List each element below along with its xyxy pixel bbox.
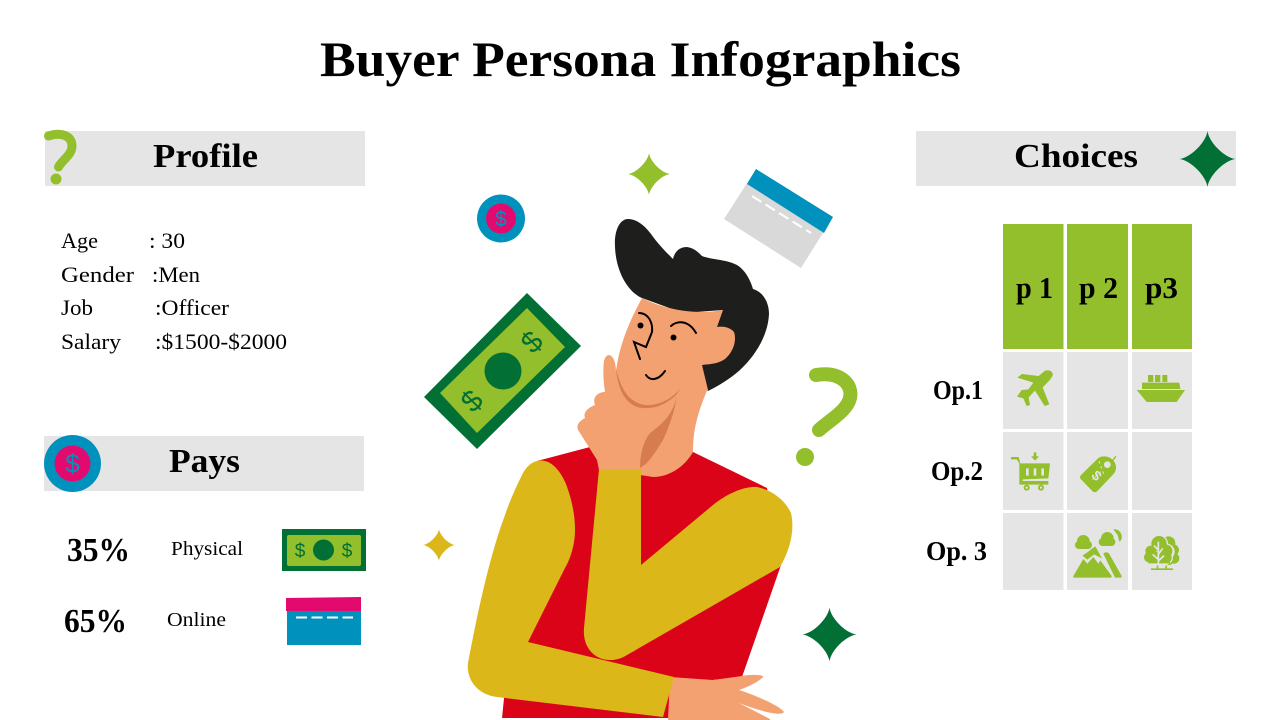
icon: dark green star [1180, 131, 1236, 187]
panel: pays [44, 435, 366, 645]
profile details: :Men [152, 262, 200, 287]
icon: lime star [628, 153, 670, 195]
column headers: p 1 [1016, 270, 1053, 305]
table cells [1003, 352, 1192, 590]
physical row: Physical [171, 538, 243, 560]
row labels: Op.1 [933, 375, 983, 405]
online row: Online [167, 609, 226, 631]
pays heading: Pays [169, 443, 240, 480]
title: Buyer Persona Infographics [320, 31, 961, 87]
row labels: Op. 3 [926, 536, 987, 566]
profile details: Age [61, 228, 98, 253]
physical row [67, 529, 366, 571]
neck and collar [625, 388, 708, 477]
face [616, 298, 735, 407]
jaw line [616, 368, 680, 408]
profile header bar [45, 131, 365, 186]
column headers [1003, 224, 1192, 349]
icon: large question mark [796, 374, 850, 466]
left sleeve [468, 461, 674, 717]
profile heading: Profile [153, 138, 258, 175]
column headers: p3 [1145, 270, 1178, 305]
icon: coin [44, 435, 101, 492]
icon: banknote: $ [342, 541, 353, 562]
row labels [926, 375, 987, 566]
profile details: :$1500-$2000 [155, 329, 287, 354]
icon: price tag: $ [1088, 467, 1105, 484]
profile details: Job [61, 295, 93, 320]
online row [64, 597, 361, 645]
hand on chin [577, 355, 678, 470]
profile details [61, 228, 287, 354]
icon: floating coin: $ [495, 208, 507, 231]
panel: profile [45, 131, 365, 354]
icon: question mark [48, 134, 72, 184]
icon: large banknote: $ [515, 325, 550, 360]
right sleeve [584, 469, 792, 660]
profile details: : 30 [149, 228, 185, 253]
face features [634, 313, 696, 379]
icon: price tag [1080, 456, 1116, 492]
right hand [668, 675, 784, 720]
icon: floating card [724, 169, 833, 268]
central illustration: thinking man [468, 219, 792, 720]
table [926, 224, 1192, 590]
icon: mountain [1073, 529, 1122, 578]
icon: trees [1143, 535, 1179, 570]
choices heading: Choices [1014, 138, 1138, 175]
pays header bar [44, 436, 364, 491]
neck shadow [640, 395, 677, 468]
torso [502, 447, 781, 718]
column headers: p 2 [1079, 270, 1118, 305]
profile details: Salary [61, 329, 121, 354]
icon: large dark green star [802, 608, 856, 662]
row labels: Op.2 [931, 456, 983, 486]
icon: banknote [282, 529, 366, 571]
hair [615, 219, 769, 391]
physical row: 35% [67, 532, 130, 569]
icon: cart [1011, 452, 1050, 491]
icon: plane [1017, 370, 1053, 406]
profile details: :Officer [155, 295, 230, 320]
icon: ship [1137, 375, 1185, 402]
online row: 65% [64, 603, 127, 640]
icon: banknote: $ [295, 541, 306, 562]
icon: large banknote: $ [455, 384, 490, 419]
icon: yellow star [423, 529, 455, 561]
choices header bar [916, 131, 1236, 186]
icon: large banknote [424, 293, 581, 449]
icon: card [286, 597, 361, 645]
icon: floating coin [477, 194, 525, 242]
profile details: Gender [61, 262, 135, 287]
icon: coin: $ [65, 448, 80, 478]
panel: choices [916, 131, 1236, 590]
